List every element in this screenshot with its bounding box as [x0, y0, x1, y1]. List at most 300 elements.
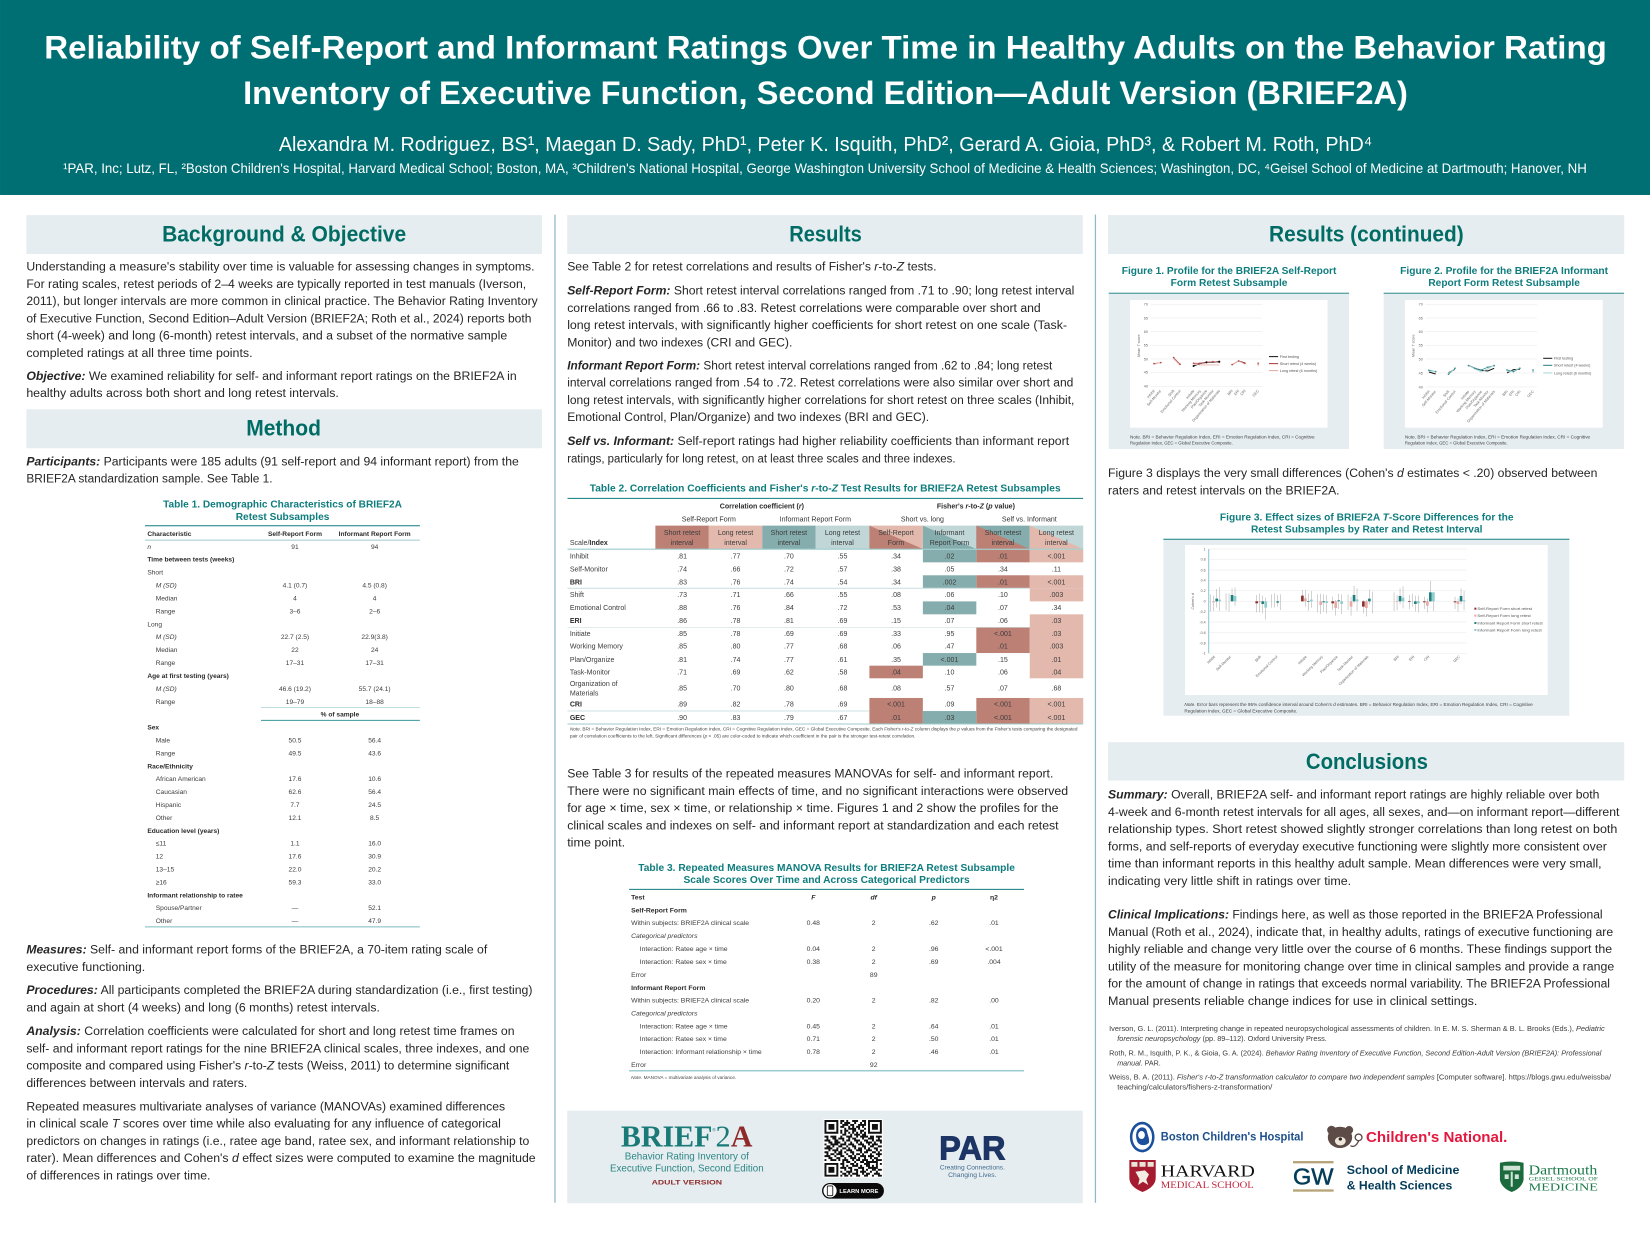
table 1 rows: 4: [373, 595, 377, 602]
figure 2 chart: Self-Monitor: [1421, 389, 1438, 407]
table 3 rows: .01: [989, 920, 999, 927]
figure 2 chart: Emotional Control: [1435, 390, 1457, 415]
logo: BRIEF2A: ADULT VERSION: [652, 1180, 722, 1187]
text: summary: indicating very little shift in ratings over time.: [1108, 874, 1351, 888]
table 2 rows: .01: [998, 553, 1008, 560]
table 1 rows: Informant Report Form: [339, 531, 411, 538]
figure 2 chart: BRI: [1502, 390, 1509, 397]
table 3 rows: .82: [929, 998, 939, 1005]
logo: Children's National: Children's National.: [1366, 1130, 1507, 1146]
table 2 rows: .79: [784, 715, 794, 722]
text: summary: [1108, 788, 1620, 888]
figure 3 chart: 0.8: [1201, 558, 1206, 562]
figure 3 chart: 0.4: [1201, 579, 1206, 583]
figure 2 chart: 60: [1419, 330, 1423, 334]
figure 2 chart: 55: [1419, 344, 1423, 348]
logo: BRIEF2A: Executive Function, Second Edition: [610, 1162, 764, 1174]
table 2 rows: .81: [784, 618, 794, 625]
table 1 rows: 4.1 (0.7): [283, 583, 307, 590]
table 3 title: Scale Scores Over Time and Across Categorical Predictors: [683, 875, 970, 886]
text: self vs informant: [567, 434, 1070, 465]
figure 1 title: Figure 1. Profile for the BRIEF2A Self-Report: [1122, 266, 1337, 277]
figure 3 chart: ERI: [1408, 655, 1415, 662]
figure 3 chart: Plan/Organize: [1320, 655, 1339, 674]
table 2 rows: .68: [838, 644, 847, 651]
table 2 rows: .03: [1051, 618, 1061, 625]
table 2 rows: .61: [838, 657, 847, 664]
table 2 rows: .47: [945, 644, 954, 651]
table 1 rows: Hispanic: [156, 802, 182, 809]
table 2 rows: .69: [838, 618, 847, 625]
table 1 rows: ≥16: [156, 879, 167, 886]
figure 3 legend: Informant Report Form long retest: [1477, 628, 1542, 632]
table 1 rows: 17.6: [289, 854, 302, 861]
table 3 rows: 0.45: [807, 1023, 820, 1030]
authors: Alexandra M. Rodriguez, BS¹, Maegan D. Sady, PhD¹, Peter K. Isquith, PhD², Gerard A. Gioia, PhD³, & Robert M. Roth, PhD⁴: [279, 133, 1372, 156]
text: informant results: [567, 358, 1074, 424]
text: manova methods: in clinical scale T scores over time while also evaluating for any influence of categorical: [26, 1117, 501, 1131]
table 2 rows: .01: [998, 644, 1008, 651]
table 2 rows: .78: [731, 631, 741, 638]
table 1 rows: Age at first testing (years): [147, 673, 229, 680]
table 1 rows: 19–79: [286, 699, 304, 706]
figure 1 chart: Working Memory: [1181, 389, 1202, 413]
logo: Dartmouth Geisel School of Medicine: [1500, 1162, 1598, 1193]
text: manova results: clinical scales and indexes on self- and informant report at standardization and each retest: [567, 818, 1059, 832]
figure 2 chart: 50: [1419, 357, 1423, 361]
table 3 rows: .50: [929, 1036, 939, 1043]
logo: BRIEF2A: [610, 1120, 764, 1187]
partner logos: [1129, 1122, 1598, 1193]
table 2 header: Short retest: [771, 530, 807, 537]
heading: Results: [567, 215, 1083, 254]
table 2 rows: Inhibit: [570, 553, 589, 560]
logo: Dartmouth Geisel School of Medicine: Dartmouth: [1529, 1163, 1598, 1178]
table 1 rows: Characteristic: [147, 531, 192, 538]
table 2 rows: .06: [998, 669, 1008, 676]
figure 1 chart: 45: [1144, 371, 1148, 375]
table 3 title: Table 3. Repeated Measures MANOVA Results for BRIEF2A Retest Subsample: [638, 863, 1015, 874]
table 2 rows: <.001: [941, 657, 958, 664]
text: summary: forms, and self-reports of everyday executive functioning were slightly more consistent over: [1108, 839, 1607, 853]
text: self-report results: correlations ranged from .66 to .83. Retest correlations were comparable over short and: [567, 301, 1041, 315]
figure 1 chart: 60: [1144, 330, 1148, 334]
logo: GW School of Medicine & Health Sciences: [1293, 1161, 1459, 1192]
figure 1 chart: 40: [1144, 385, 1148, 389]
table 3 rows: Interaction: Informant relationship × time: [640, 1049, 762, 1056]
figure 1 legend: Long retest (6 months): [1280, 369, 1317, 373]
logo: BRIEF2A: 2: [716, 1120, 731, 1154]
table 1 rows: Range: [156, 608, 176, 615]
table 2 header: Correlation coefficient (r): [720, 503, 804, 510]
table 1 rows: 47.9: [368, 918, 381, 925]
table 2 rows: .06: [998, 618, 1008, 625]
table 2 rows: .57: [838, 566, 847, 573]
figure 2 chart: 65: [1419, 316, 1423, 320]
table 2 header: Long retest: [1039, 530, 1074, 537]
table 3 title: [638, 863, 1015, 886]
table 2 rows: .04: [891, 669, 901, 676]
table 1 rows: Median: [156, 595, 178, 602]
figure 1 chart: Task-Monitor: [1198, 388, 1215, 408]
text: objective: [26, 369, 517, 400]
figure 2 chart: 70: [1419, 303, 1423, 307]
table 1 rows: 33.0: [368, 879, 381, 886]
figure 2 chart: CRI: [1514, 390, 1522, 397]
references: Weiss, B. A. (2011). Fisher's r-to-Z transformation calculator to compare two independent samples [Computer software]. https://blogs.gwu.edu/weissba/: [1109, 1073, 1612, 1082]
table 2 rows: .66: [731, 566, 741, 573]
table 2 rows: .83: [677, 579, 687, 586]
figure 1 chart: GEC: [1252, 389, 1260, 398]
figure 3 legend: Self-Report Form short retest: [1477, 607, 1532, 611]
text: manova methods: Repeated measures multivariate analyses of variance (MANOVAs) examined differences: [26, 1099, 505, 1113]
figure 2 chart: 40: [1419, 385, 1423, 389]
table 2 rows: .71: [731, 592, 741, 599]
table 1 rows: n: [147, 544, 151, 551]
table 2 rows: .76: [731, 579, 741, 586]
text: self-report results: [567, 284, 1074, 349]
figure 2 chart: Shift: [1442, 390, 1450, 398]
text: manova methods: [26, 1099, 536, 1182]
table 2 rows: .07: [998, 686, 1008, 693]
figure 3 title: Figure 3. Effect sizes of BRIEF2A T-Score Differences for the: [1220, 513, 1514, 524]
figure 2 chart: Inhibit: [1421, 390, 1431, 400]
table 2 rows: .10: [998, 592, 1008, 599]
table 2 rows: .03: [1051, 631, 1061, 638]
table 2 header: Long retest: [825, 530, 860, 537]
text: manova methods: predictors on changes in ratings (i.e., ratee age band, ratee sex, and informant relationship to: [26, 1134, 529, 1148]
figure 3 chart: -0.4: [1199, 620, 1206, 624]
logo: Boston Children's Hospital: Boston Children's Hospital: [1161, 1130, 1303, 1144]
table 1 rows: 18–88: [365, 699, 384, 706]
logo: GW School of Medicine & Health Sciences: School of Medicine: [1347, 1163, 1459, 1177]
table 2 rows: Self-Monitor: [570, 566, 608, 573]
table 2 rows: .01: [1051, 657, 1061, 664]
table 2 rows: .08: [891, 686, 901, 693]
text: results intro: See Table 2 for retest correlations and results of Fisher's r-to-Z tests.: [567, 260, 937, 274]
figure 3 note: Regulation Index, GEC = Global Executive Composite.: [1184, 709, 1297, 714]
table 1 rows: —: [292, 918, 299, 925]
table 2 rows: <.001: [1047, 702, 1065, 709]
table 1 rows: Range: [156, 660, 176, 667]
table 2 rows: .06: [891, 644, 901, 651]
table 3 rows: Error: [631, 1062, 647, 1069]
table 3 rows: 2: [872, 1049, 876, 1056]
table 2 rows: .003: [1050, 644, 1063, 651]
table 2 rows: Plan/Organize: [570, 657, 615, 664]
table 2 rows: .10: [945, 669, 954, 676]
table 2 note: pair of correlation coefficients to the left. Significant differences ( p < .05) are color-coded to indicate which coefficient in the pair is the stronger test-retest correlation.: [570, 733, 915, 738]
table 2 header: Fisher's r-to-Z (p value): [937, 503, 1015, 510]
table 1 rows: Race/Ethnicity: [147, 763, 193, 770]
table 1 rows: Caucasian: [156, 789, 187, 796]
figure 1 legend: First testing: [1280, 355, 1299, 359]
table 2 header: Informant: [935, 530, 964, 537]
table 2 header: Report Form: [930, 540, 969, 547]
table 2 rows: .01: [998, 579, 1008, 586]
table 1 title: Retest Subsamples: [236, 512, 330, 523]
table 2 header: interval: [992, 540, 1015, 547]
table 3 rows: .01: [989, 1049, 999, 1056]
table 3 rows: 0.78: [807, 1049, 820, 1056]
table 2 rows: .38: [891, 566, 901, 573]
figure 1 chart: Shift: [1168, 389, 1175, 397]
table 2 rows: Task-Monitor: [570, 669, 611, 676]
table 1 rows: 12: [156, 854, 163, 861]
table 3 rows: 0.38: [807, 959, 820, 966]
text: self-report results: long retest intervals, with significantly higher coefficients for short retest on one scale (Task-: [567, 318, 1067, 332]
table 3 rows: Test: [631, 894, 645, 901]
heading: Results (continued): [1108, 215, 1624, 254]
table 3 rows: .62: [929, 920, 939, 927]
table 2 rows: .07: [945, 618, 954, 625]
figure 3: effect sizes: [1163, 513, 1569, 716]
table 1 rows: ≤11: [156, 841, 167, 848]
table 1 rows: African American: [156, 776, 206, 783]
table 2: correlations: [568, 484, 1083, 738]
text: clinical implications: Manual (Roth et al., 2024), indicate that, in healthy adults, ratings of executive functioning are: [1108, 925, 1613, 939]
figure 2 legend: [1543, 357, 1591, 375]
table 1 rows: 13–15: [156, 866, 174, 873]
table 1 rows: Median: [156, 647, 178, 654]
table 1 rows: Spouse/Partner: [156, 905, 202, 912]
figure 1 chart: Organization of Materials: [1191, 389, 1221, 423]
figure 3 chart: BRI: [1393, 655, 1400, 662]
logo: Children's National: [1327, 1126, 1507, 1148]
table 3 rows: <.001: [985, 946, 1003, 953]
table 2 rows: .33: [891, 631, 901, 638]
table 2 rows: .72: [784, 566, 794, 573]
table 2 title: Table 2. Correlation Coefficients and Fisher's r-to-Z Test Results for BRIEF2A Retest Subsamples: [590, 484, 1061, 495]
table 3 rows: .01: [989, 1036, 999, 1043]
table 3 rows: .96: [929, 946, 939, 953]
figure 3 legend: Informant Report Form short retest: [1477, 621, 1543, 625]
text: self-report results: Monitor) and two indexes (CRI and GEC).: [567, 335, 792, 349]
figure 2 title: Report Form Retest Subsample: [1428, 278, 1580, 289]
figure 3 chart: 0.2: [1201, 589, 1206, 593]
table 3 rows: .00: [989, 998, 999, 1005]
header banner: [0, 0, 1650, 195]
text: figure 3 intro: [1108, 466, 1598, 497]
table 2 rows: <.001: [1047, 715, 1065, 722]
table 2 rows: <.001: [1047, 553, 1065, 560]
table 2 rows: .69: [731, 669, 741, 676]
figure 3 chart: Organization of Materials: [1338, 655, 1370, 686]
table 3 rows: 0.04: [807, 946, 820, 953]
text: informant results: interval correlations ranged from .54 to .72. Retest correlations were also similar over short and: [567, 376, 1073, 390]
references: forensic neuropsychology (pp. 89–112). Oxford University Press.: [1117, 1034, 1327, 1043]
table 2 rows: .03: [945, 715, 954, 722]
table 3 rows: 2: [872, 920, 876, 927]
table 3 rows: Interaction: Ratee age × time: [640, 946, 728, 953]
table 1 rows: 55.7 (24.1): [359, 686, 391, 693]
heading: Method: [26, 409, 542, 448]
text: manova results: time point.: [567, 836, 625, 850]
table 3 rows: Interaction: Ratee age × time: [640, 1023, 728, 1030]
figure 3 chart: Initiate: [1297, 655, 1308, 665]
table 2 header: interval: [831, 540, 854, 547]
text: procedures: Procedures: All participants completed the BRIEF2A during standardization (i.e., first testing): [26, 983, 532, 997]
text: clinical implications: Clinical Implications: Findings here, as well as those reported in the BRIEF2A Professional: [1108, 908, 1603, 922]
heading: Background & Objective: [26, 215, 542, 254]
table 1 title: [163, 500, 402, 523]
figure 2 chart: GEC: [1527, 389, 1535, 398]
table 2 rows: .70: [784, 553, 794, 560]
table 2 rows: .81: [677, 657, 687, 664]
table 2 rows: <.001: [1047, 579, 1065, 586]
text: background: completed ratings at all three time points.: [26, 346, 253, 360]
text: summary: Summary: Overall, BRIEF2A self- and informant report ratings are highly reliable over both: [1108, 788, 1600, 802]
figure 3 chart: Working Memory: [1301, 655, 1324, 677]
logo: BRIEF2A: A: [731, 1120, 752, 1154]
figure 2 chart: ERI: [1508, 390, 1515, 397]
table 1 rows: 24.5: [368, 802, 381, 809]
text: participants: Participants: Participants were 185 adults (91 self-report and 94 informant report) from the: [26, 454, 519, 468]
figure 3 chart: [1184, 547, 1543, 714]
table 3 rows: 2: [872, 1023, 876, 1030]
figure 2 chart: Initiate: [1460, 390, 1470, 401]
table 2 rows: .89: [677, 702, 687, 709]
figure 3 chart: GEC: [1453, 655, 1461, 663]
table 1 rows: 43.6: [368, 750, 381, 757]
table 3 rows: [631, 894, 1003, 1069]
table 2 rows: .69: [784, 631, 794, 638]
figure 2: informant profile: [1384, 266, 1624, 449]
text: analysis: [25, 1024, 529, 1090]
table 2 rows: .55: [838, 553, 847, 560]
table 2 rows: .53: [891, 605, 901, 612]
table 1 rows: 17–31: [286, 660, 304, 667]
title: [44, 28, 1607, 111]
text: analysis: Analysis: Correlation coefficients were calculated for short and long retest time frames on: [25, 1024, 515, 1038]
table 1 rows: 20.2: [368, 866, 381, 873]
table 1 rows: M (SD): [156, 634, 177, 641]
table 2 rows: .88: [677, 605, 687, 612]
table 3 rows: .01: [989, 1023, 999, 1030]
figure 1 title: [1122, 266, 1337, 289]
text: analysis: differences between intervals and raters.: [26, 1076, 247, 1090]
logo: Harvard Medical School: MEDICAL SCHOOL: [1161, 1181, 1254, 1191]
text: self-report results: Self-Report Form: Short retest interval correlations ranged from .71 to .90; long retest interval: [567, 284, 1074, 298]
title: Reliability of Self-Report and Informant Ratings Over Time in Healthy Adults on the Behavior Rating: [44, 28, 1607, 65]
table 3 rows: 2: [872, 1036, 876, 1043]
table 2 rows: .77: [784, 657, 794, 664]
table 2 header: Short retest: [664, 530, 700, 537]
table 1 rows: —: [292, 905, 299, 912]
table 2 rows: .68: [838, 686, 847, 693]
logo: Dartmouth Geisel School of Medicine: GEISEL SCHOOL OF: [1529, 1177, 1598, 1182]
logo: BRIEF2A: Behavior Rating Inventory of: [625, 1151, 749, 1163]
table 1 rows: 46.6 (19.2): [279, 686, 311, 693]
figure 1 chart: Plan/Organize: [1190, 389, 1208, 409]
text: background: For rating scales, retest periods of 2–4 weeks are typically reported in test manuals (Iverson,: [26, 277, 526, 291]
table 2 rows: .78: [731, 618, 741, 625]
figure 2 chart: [1405, 303, 1591, 446]
figure 1 chart: 65: [1144, 316, 1148, 320]
table 2 rows: .34: [891, 579, 901, 586]
table 1 rows: 8.5: [370, 815, 380, 822]
figure 1 legend: [1269, 355, 1317, 373]
table 3 note: Note. MANOVA = multivariate analysis of variance.: [631, 1075, 736, 1080]
logo: Harvard Medical School: HARVARD: [1161, 1161, 1255, 1180]
figure 3 chart: 0.6: [1201, 568, 1206, 572]
table 1 rows: % of sample: [321, 712, 360, 719]
table 2 rows: Materials: [570, 690, 599, 697]
table 1 rows: 22.7 (2.5): [281, 634, 309, 641]
table 2 rows: .15: [998, 657, 1008, 664]
table 2 rows: .02: [945, 553, 954, 560]
table 2 rows: .34: [891, 553, 901, 560]
table 2 rows: .85: [677, 686, 687, 693]
table 2 rows: .06: [945, 592, 954, 599]
figure 3 chart: Inhibit: [1206, 655, 1216, 665]
table 3 rows: df: [870, 894, 878, 901]
table 2 rows: .82: [731, 702, 741, 709]
figure 2 chart: Plan/Organize: [1465, 390, 1483, 410]
figure 3 legend: [1474, 607, 1543, 632]
table 3 rows: .64: [929, 1023, 939, 1030]
figure 1 chart: Inhibit: [1146, 389, 1156, 399]
figure 2 legend: Short retest (4 weeks): [1554, 364, 1590, 368]
figure 3 legend: Self-Report Form long retest: [1477, 614, 1531, 618]
table 2 rows: .54: [838, 579, 847, 586]
references: Iverson, G. L. (2011). Interpreting change in repeated neuropsychological assessments of children. In E. M. S. Sherman & B. L. Brooks (Eds.), Pediatric: [1109, 1024, 1605, 1033]
figure 3 chart: 0: [1204, 600, 1206, 604]
table 1 rows: 52.1: [368, 905, 381, 912]
text: background: [26, 260, 539, 360]
table 2 rows: <.001: [887, 702, 905, 709]
figure 3 chart: Emotional Control: [1255, 655, 1279, 678]
references: [1109, 1024, 1612, 1092]
table 3 rows: Informant Report Form: [631, 985, 705, 992]
figure 3 chart: 1: [1204, 547, 1206, 551]
figure 1 chart: Initiate: [1185, 389, 1195, 400]
table 3 rows: Interaction: Ratee sex × time: [640, 959, 727, 966]
table 3 rows: Interaction: Ratee sex × time: [640, 1036, 727, 1043]
table 2 rows: Organization of: [570, 681, 618, 688]
logo: Harvard Medical School: [1129, 1160, 1255, 1192]
table 2 rows: .85: [677, 631, 687, 638]
figure 3 note: Note. Error bars represent the 95% confidence interval around Cohen's d estimates. BRI = Behavior Regulation Index, ERI = Emotion Regulation Index, CRI = Cognitive: [1184, 702, 1533, 707]
table 3: manova: [629, 863, 1024, 1080]
text: clinical implications: for the amount of change in ratings that exceeds normal variability. The BRIEF2A Professional: [1108, 977, 1610, 991]
table 1 rows: Range: [156, 750, 176, 757]
panel: logos and QR: [567, 1111, 1083, 1203]
text: measures: executive functioning.: [26, 960, 145, 974]
table 2 rows: .003: [1050, 592, 1063, 599]
table 1 rows: Other: [156, 918, 173, 925]
figure 3 chart: Cohen's d: [1191, 592, 1195, 609]
button: learn more: [822, 1183, 884, 1199]
table 2 rows: <.001: [994, 702, 1012, 709]
text: manova results: See Table 3 for results of the repeated measures MANOVAs for self- and informant report.: [567, 767, 1053, 781]
text: background: 2011), but longer intervals are more common in clinical practice. The Behavior Rating Inventory: [26, 294, 539, 308]
table 2 rows: .80: [731, 644, 741, 651]
table 1 rows: Time between tests (weeks): [147, 557, 234, 564]
figure 1 chart: Emotional Control: [1160, 389, 1182, 414]
text: summary: 4-week and 6-month retest intervals for all ages, all sexes, and—on informant report—different: [1108, 805, 1620, 819]
table 2 rows: .80: [784, 686, 794, 693]
figure 1 chart: Self-Monitor: [1146, 388, 1163, 407]
table 2 rows: .78: [784, 702, 794, 709]
table 2 header: Informant Report Form: [780, 516, 851, 523]
text: measures: Measures: Self- and informant report forms of the BRIEF2A, a 70-item rating scale of: [26, 943, 488, 957]
table 1 rows: [147, 531, 411, 925]
text: background: of Executive Function, Second Edition–Adult Version (BRIEF2A; Roth et al., 2024) reports both: [26, 311, 532, 325]
table 1 rows: Self-Report Form: [268, 531, 322, 538]
table 2 rows: .90: [677, 715, 687, 722]
table 1 rows: 10.6: [368, 776, 381, 783]
